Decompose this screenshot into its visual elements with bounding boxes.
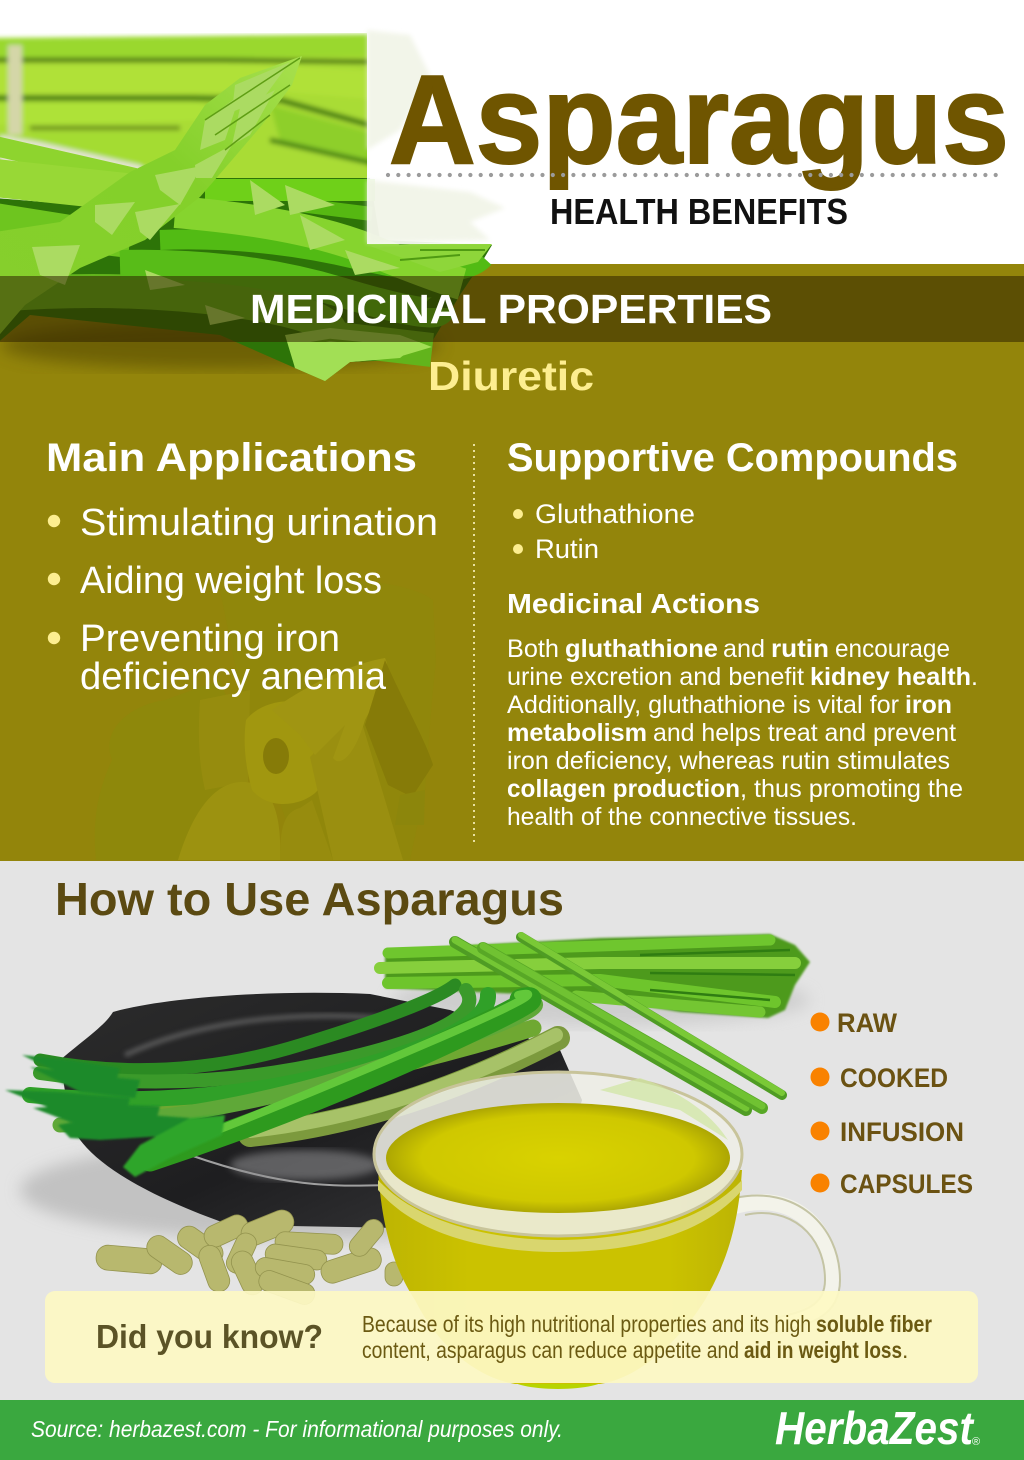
text: medicinal actions description: iron deficiency, whereas rutin stimulates (507, 747, 950, 775)
text: did you know body: Because of its high nutritional properties and its high (362, 1311, 811, 1337)
list: applications: Stimulating urination (80, 502, 438, 544)
list: ways to use: INFUSION (840, 1117, 964, 1147)
text: medicinal actions description: collagen production (507, 775, 740, 803)
list: ways to use: COOKED (840, 1063, 948, 1093)
text: medicinal actions description: urine excretion and benefit (507, 663, 804, 691)
callout: did you know (45, 1291, 978, 1383)
list: ways to use: CAPSULES (840, 1169, 973, 1199)
text: did you know body: aid in weight loss (744, 1337, 902, 1363)
tea surface (386, 1103, 730, 1213)
list: applications (48, 502, 438, 698)
text: medicinal actions description: Both (507, 635, 559, 663)
cup glass rim (374, 1072, 742, 1236)
heading: medicinal properties: MEDICINAL PROPERTIES (250, 286, 772, 332)
main diagonal spear (0, 56, 302, 340)
panel: how to use background (0, 861, 1024, 1400)
footer source: Source: herbazest.com - For informational purposes only. (31, 1416, 563, 1442)
text: did you know body: soluble fiber (816, 1311, 932, 1337)
list: applications: Aiding weight loss (80, 560, 382, 602)
cup bottom tint (510, 1367, 606, 1389)
heading: diuretic: Diuretic (428, 353, 594, 399)
faint faded asparagus on white (367, 30, 505, 243)
text: medicinal actions description: , thus promoting the (740, 775, 963, 803)
white fade over photo right edge (367, 25, 502, 244)
list: compounds (513, 499, 695, 564)
text: did you know body: . (902, 1337, 908, 1363)
label: did you know: Did you know? (96, 1318, 323, 1355)
panel: main applications (46, 436, 438, 698)
text: medicinal actions description: metabolism (507, 719, 647, 747)
text: medicinal actions description: health of the connective tissues. (507, 803, 857, 831)
text: medicinal actions description: iron (905, 691, 952, 719)
logo: HerbaZest: HerbaZest (775, 1402, 974, 1454)
heading: medicinal actions: Medicinal Actions (507, 588, 760, 619)
footer bar (0, 1400, 1024, 1460)
text: medicinal actions description: kidney health (810, 663, 971, 691)
text: medicinal actions description: gluthathione (565, 635, 718, 663)
cup handle (735, 1202, 832, 1325)
panel: medicinal properties background (0, 264, 1024, 861)
text: did you know body (362, 1311, 932, 1363)
bundle dark mass (385, 934, 810, 1018)
list: applications: Preventing iron (80, 618, 340, 660)
title: Asparagus: Asparagus (389, 49, 1009, 190)
illustration: black pan (20, 993, 582, 1240)
text: medicinal actions description: encourage (835, 635, 950, 663)
text: medicinal actions description: . (971, 663, 978, 691)
text: medicinal actions description: and (723, 635, 765, 663)
logo: HerbaZest: ® (972, 1436, 980, 1448)
subtitle: health benefits: HEALTH BENEFITS (550, 191, 848, 232)
thin diagonal stalks (455, 935, 782, 1110)
list: applications: deficiency anemia (80, 656, 387, 698)
illustration: cooked asparagus (30, 985, 558, 1160)
illustration: cup of tea (374, 1072, 840, 1389)
text: medicinal actions description: rutin (771, 635, 829, 663)
illustration: asparagus header photo (0, 25, 505, 381)
heading: main applications: Main Applications (46, 436, 417, 480)
dotted divider (388, 173, 1003, 177)
list: ways to use (810, 1008, 973, 1199)
text: medicinal actions description: and helps treat and prevent (653, 719, 956, 747)
cooked tips (5, 1055, 225, 1177)
illustration: raw asparagus bundle (380, 934, 810, 1110)
text: medicinal actions description: Additionally, gluthathione is vital for (507, 691, 899, 719)
lower stalks (0, 146, 484, 350)
illustration: capsules (95, 1206, 403, 1307)
text: did you know body: content, asparagus can reduce appetite and (362, 1337, 739, 1363)
heading: how to use asparagus: How to Use Asparagus (55, 873, 564, 925)
dark mass behind stalks (0, 178, 492, 381)
shadow below stalks (0, 321, 440, 369)
heading: supportive compounds: Supportive Compounds (507, 436, 958, 480)
text: medicinal actions description (507, 635, 978, 831)
illustration: woman holding toilet roll watermark (95, 580, 436, 860)
spear scales (32, 62, 400, 325)
tip foreground highlight (290, 342, 420, 381)
cup body (378, 1170, 742, 1384)
panel: supportive compounds (507, 436, 978, 831)
list: ways to use: RAW (837, 1008, 897, 1038)
tip clusters (285, 328, 432, 381)
list: compounds: Rutin (535, 534, 599, 564)
list: compounds: Gluthathione (535, 499, 695, 529)
column divider (473, 444, 475, 845)
band: medicinal properties (0, 276, 1024, 342)
blurred asparagus bundle background (0, 33, 367, 178)
